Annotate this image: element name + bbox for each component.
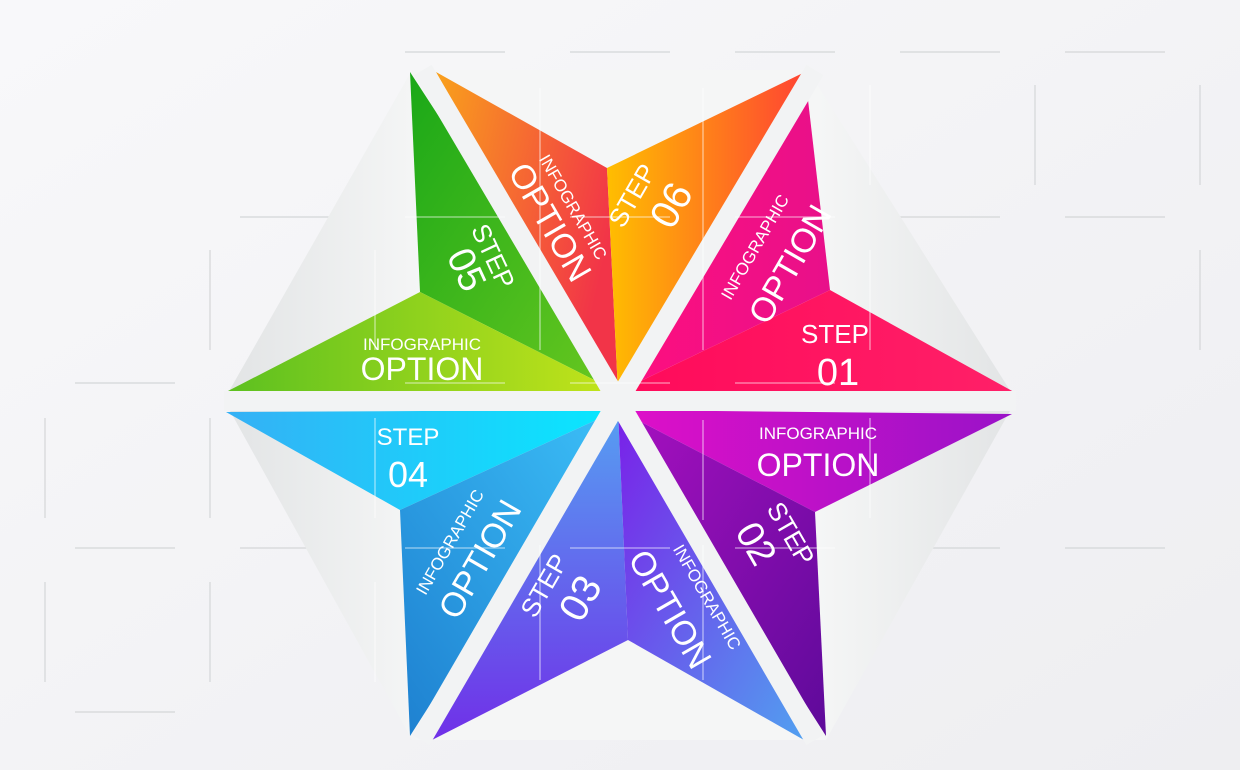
text: step 02: 02 <box>727 515 784 573</box>
text: step 06 <box>602 159 702 236</box>
text: step 04: STEP <box>377 424 439 451</box>
sector: step 02 (lower right) <box>618 410 1012 736</box>
text: option lower-right <box>757 424 879 483</box>
text: option lower-left: INFOGRAPHIC <box>412 486 488 598</box>
text: step 03 <box>514 549 611 629</box>
text: step 06: 06 <box>642 175 702 236</box>
text: step 04: 04 <box>388 454 428 495</box>
text: option upper-right: INFOGRAPHIC <box>717 191 793 303</box>
text: step 01: 01 <box>817 352 859 394</box>
text: step 04 <box>377 424 439 495</box>
text: option upper-right: OPTION <box>741 199 840 330</box>
text: option lower-left: OPTION <box>431 494 530 625</box>
text: step 05 <box>438 219 521 298</box>
text: step 01: STEP <box>801 319 869 349</box>
sector: step 03 (bottom) <box>432 410 804 740</box>
text: step 01 <box>801 319 869 394</box>
text: step 02: STEP <box>761 497 821 570</box>
text: step 02 <box>727 497 821 573</box>
text: option upper-left <box>361 335 483 387</box>
sector: step 04 (lower left) <box>226 410 618 736</box>
text: option top-left: INFOGRAPHIC <box>535 151 611 263</box>
sector: step 06 (top) <box>436 72 805 392</box>
text: option bottom: INFOGRAPHIC <box>669 541 745 653</box>
text: step 05: 05 <box>438 242 494 298</box>
text: option lower-right: OPTION <box>757 447 879 483</box>
text: option bottom: OPTION <box>620 544 719 675</box>
text: option lower-right: INFOGRAPHIC <box>759 424 877 443</box>
text: option top-left: OPTION <box>500 157 599 288</box>
text: option upper-left: INFOGRAPHIC <box>363 335 481 354</box>
text: step 03: STEP <box>514 549 574 622</box>
text: step 06: STEP <box>602 159 662 232</box>
text: step 05: STEP <box>465 219 521 293</box>
sector: step 01 (upper right) <box>618 74 1014 392</box>
sector: step 05 (upper left) <box>226 72 618 392</box>
text: step 03: 03 <box>551 568 611 629</box>
hexagon base <box>224 70 1016 740</box>
text: option upper-left: OPTION <box>361 351 483 387</box>
